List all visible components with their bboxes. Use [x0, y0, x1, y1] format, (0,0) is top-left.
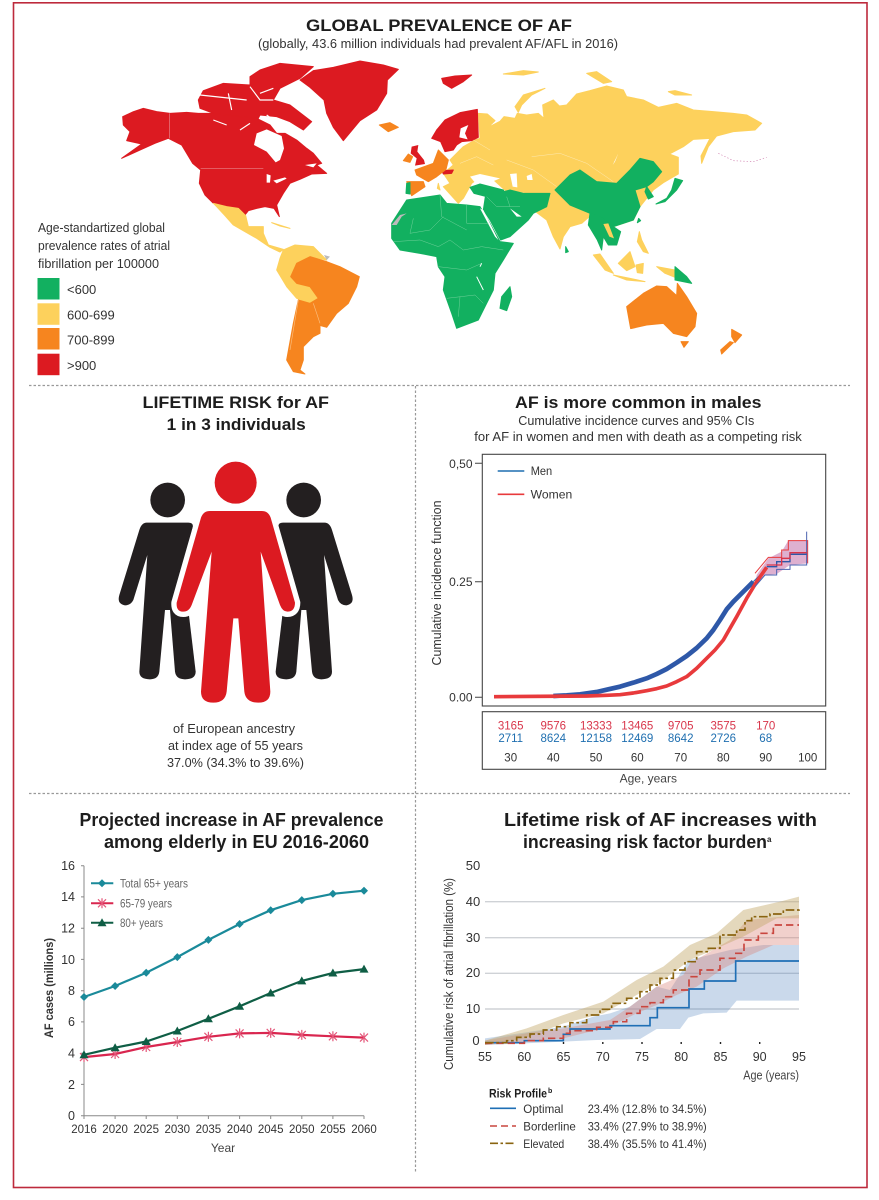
numbers at risk table: 12469 [621, 733, 653, 745]
x-axis title: Year [211, 1141, 235, 1155]
elevated line [485, 907, 799, 1043]
heading [142, 393, 329, 434]
y-axis labels [61, 859, 75, 1123]
legend swatch: 700-899: 700-899 [67, 332, 115, 348]
subheading: for AF in women and men with death as a competing risk [474, 429, 802, 444]
numbers at risk table: 60 [631, 753, 644, 765]
y-axis title: AF cases (millions) [42, 938, 56, 1038]
x-axis labels: 70 [596, 1050, 610, 1064]
x-axis title: Age, years [620, 772, 677, 786]
panel: global prevalence [38, 16, 767, 375]
chart legend: 80+ years [120, 918, 163, 930]
numbers at risk table: 80 [717, 753, 730, 765]
numbers at risk table: 170 [756, 720, 775, 732]
numbers at risk table: 3165 [498, 720, 523, 732]
map: French Guiana [324, 255, 330, 260]
x-axis labels: 2055 [320, 1124, 346, 1136]
risk profile legend: Borderline [523, 1120, 576, 1134]
y-axis labels [466, 858, 480, 1048]
numbers at risk table: 12158 [580, 733, 612, 745]
heading: increasing risk factor burden [523, 832, 767, 852]
numbers at risk table: 3575 [711, 720, 736, 732]
chart legend: Total 65+ years [120, 878, 188, 890]
map: Hudson Bay and channels [254, 129, 317, 183]
y-axis labels: 0.25 [449, 575, 473, 589]
numbers at risk table: 8642 [668, 733, 693, 745]
x-axis labels [71, 1124, 377, 1136]
numbers at risk table: 13465 [621, 720, 653, 732]
y-axis labels: 50 [466, 858, 480, 873]
x-axis labels: 95 [792, 1050, 806, 1064]
panel: lifetime risk by risk factor burden [442, 810, 817, 1151]
map: Gulf of Bothnia [459, 125, 468, 139]
x-axis labels: 2060 [351, 1124, 377, 1136]
y-axis labels: 30 [466, 930, 480, 945]
chart legend [498, 464, 572, 502]
incidence chart [430, 454, 826, 786]
title: GLOBAL PREVALENCE OF AF [306, 16, 572, 35]
series: 80+ [80, 965, 368, 1058]
subheading [474, 413, 802, 444]
x-axis labels: 2045 [258, 1124, 283, 1136]
x-axis labels [478, 1050, 806, 1064]
numbers at risk table: 2711 [498, 733, 523, 745]
y-axis labels: 14 [61, 890, 75, 904]
icon: three people [119, 462, 353, 703]
map: Laos [603, 223, 614, 238]
map: Americas [122, 61, 425, 374]
numbers at risk table [482, 712, 826, 769]
legend heading: prevalence rates of atrial [38, 238, 170, 253]
legend swatch: 600-699 [38, 303, 115, 325]
risk profile legend: 23.4% (12.8% to 34.5%) [588, 1102, 707, 1116]
x-axis labels: 2030 [165, 1124, 190, 1136]
text: ancestry statistics: at index age of 55 years [168, 738, 303, 753]
borderline line [485, 925, 799, 1043]
heading: Projected increase in AF prevalence [80, 810, 384, 830]
legend swatch: over 900 [38, 354, 96, 375]
y-axis labels: 0,50 [449, 457, 473, 471]
panel: lifetime risk [119, 393, 353, 770]
world map [122, 61, 767, 374]
heading [504, 810, 817, 852]
numbers at risk table: 13333 [580, 720, 612, 732]
legend heading [38, 220, 170, 271]
map: United Kingdom [411, 145, 425, 166]
legend swatch: 700-899 [38, 328, 115, 350]
y-axis title: Cumulative incidence function [430, 500, 444, 666]
x-axis labels: 75 [635, 1050, 649, 1064]
legend swatch: over 900: >900 [67, 358, 96, 373]
y-axis labels: 0 [472, 1033, 480, 1048]
chart legend [91, 878, 188, 930]
panel: projected increase [42, 810, 384, 1155]
risk profile legend: 38.4% (35.5% to 41.4%) [588, 1137, 707, 1151]
elevated band [485, 897, 799, 1045]
chart legend: Women [531, 488, 572, 502]
map legend [38, 220, 170, 375]
y-axis labels: 8 [68, 984, 75, 998]
legend swatch: 600-699: 600-699 [67, 308, 115, 322]
x-axis labels: 90 [753, 1050, 767, 1064]
series: 65-79 [80, 1028, 368, 1062]
heading: AF is more common in males [515, 393, 762, 412]
risk profile legend: b [548, 1088, 552, 1095]
women curve [494, 567, 767, 697]
x-axis labels: 55 [478, 1050, 492, 1064]
y-axis labels: 40 [466, 894, 480, 909]
panel: AF in males [430, 393, 826, 786]
y-axis labels: 16 [61, 859, 75, 873]
x-axis labels: 2020 [102, 1124, 128, 1136]
legend heading: Age-standartized global [38, 220, 165, 235]
numbers at risk table: 30 [504, 753, 517, 765]
heading: 1 in 3 individuals [167, 415, 306, 434]
numbers at risk table: 2726 [711, 733, 736, 745]
gridlines [485, 902, 799, 1009]
chart legend: 65-79 years [120, 898, 172, 910]
heading: LIFETIME RISK for AF [142, 393, 329, 412]
x-axis labels: 2025 [133, 1124, 159, 1136]
optimal band [485, 945, 799, 1045]
men curve [553, 582, 753, 696]
numbers at risk table: 40 [547, 753, 560, 765]
y-axis labels: 0.00 [449, 690, 473, 704]
legend swatch: under 600 [38, 278, 96, 300]
optimal line [485, 961, 799, 1043]
y-axis labels: 0 [68, 1109, 75, 1123]
x-axis labels: 80 [674, 1050, 688, 1064]
risk chart [442, 858, 806, 1151]
map: Eurasia, Africa, Oceania [392, 71, 767, 354]
line chart [42, 859, 377, 1155]
risk profile legend: 33.4% (27.9% to 38.9%) [588, 1120, 707, 1134]
x-axis labels: 60 [517, 1050, 531, 1064]
map: Western Sahara [392, 213, 407, 225]
text: ancestry statistics [167, 721, 304, 770]
y-axis title: Cumulative risk of atrial fibrillation (%) [442, 878, 456, 1070]
legend swatch: under 600: <600 [67, 282, 96, 297]
x-axis labels: 2040 [227, 1124, 252, 1136]
numbers at risk table: 9576 [541, 720, 566, 732]
y-axis labels: 10 [466, 1001, 480, 1016]
numbers at risk table: 68 [759, 733, 772, 745]
confidence region [755, 541, 808, 587]
map: Aleutian fragments [718, 153, 767, 162]
x-axis labels: 2050 [289, 1124, 315, 1136]
series: total 65+ [80, 887, 368, 1001]
y-axis labels: 6 [68, 1015, 75, 1029]
y-axis labels: 20 [466, 965, 480, 980]
heading: among elderly in EU 2016-2060 [104, 832, 369, 852]
x-axis title: Age (years) [743, 1068, 799, 1082]
y-axis labels: 10 [61, 953, 75, 967]
y-axis labels: 2 [68, 1078, 75, 1092]
heading: Lifetime risk of AF increases with [504, 810, 817, 830]
y-axis labels [449, 457, 473, 704]
subheading: Cumulative incidence curves and 95% CIs [518, 413, 755, 428]
numbers at risk table: 9705 [668, 720, 693, 732]
curves and bands [485, 897, 799, 1045]
text: ancestry statistics: 37.0% (34.3% to 39.6%) [167, 755, 304, 770]
curves [494, 532, 808, 697]
risk profile legend: Risk Profile [489, 1086, 547, 1100]
numbers at risk table: 70 [674, 753, 687, 765]
legend heading: fibrillation per 100000 [38, 256, 159, 271]
y-axis labels: 12 [61, 922, 75, 936]
numbers at risk table: 100 [798, 753, 817, 765]
x-axis labels: 85 [714, 1050, 727, 1064]
subtitle: (globally, 43.6 million individuals had prevalent AF/AFL in 2016) [258, 36, 618, 51]
x-axis labels: 2016 [71, 1124, 97, 1136]
y-axis labels: 4 [68, 1046, 75, 1060]
numbers at risk table: 50 [590, 753, 602, 765]
risk profile legend: Elevated [523, 1137, 564, 1151]
risk profile legend: Optimal [523, 1102, 563, 1116]
risk profile legend [489, 1086, 707, 1151]
map: Persian Gulf and Red Sea [480, 208, 522, 240]
x-axis labels: 65 [557, 1050, 570, 1064]
heading [80, 810, 384, 852]
heading: a [767, 835, 772, 844]
text: ancestry statistics: of European ancestry [173, 721, 295, 736]
numbers at risk table: 8624 [541, 733, 567, 745]
numbers at risk table: 90 [759, 753, 772, 765]
borderline band [485, 915, 799, 1045]
x-axis labels: 2035 [196, 1124, 221, 1136]
chart legend: Men [531, 464, 552, 478]
axes [81, 866, 364, 1119]
